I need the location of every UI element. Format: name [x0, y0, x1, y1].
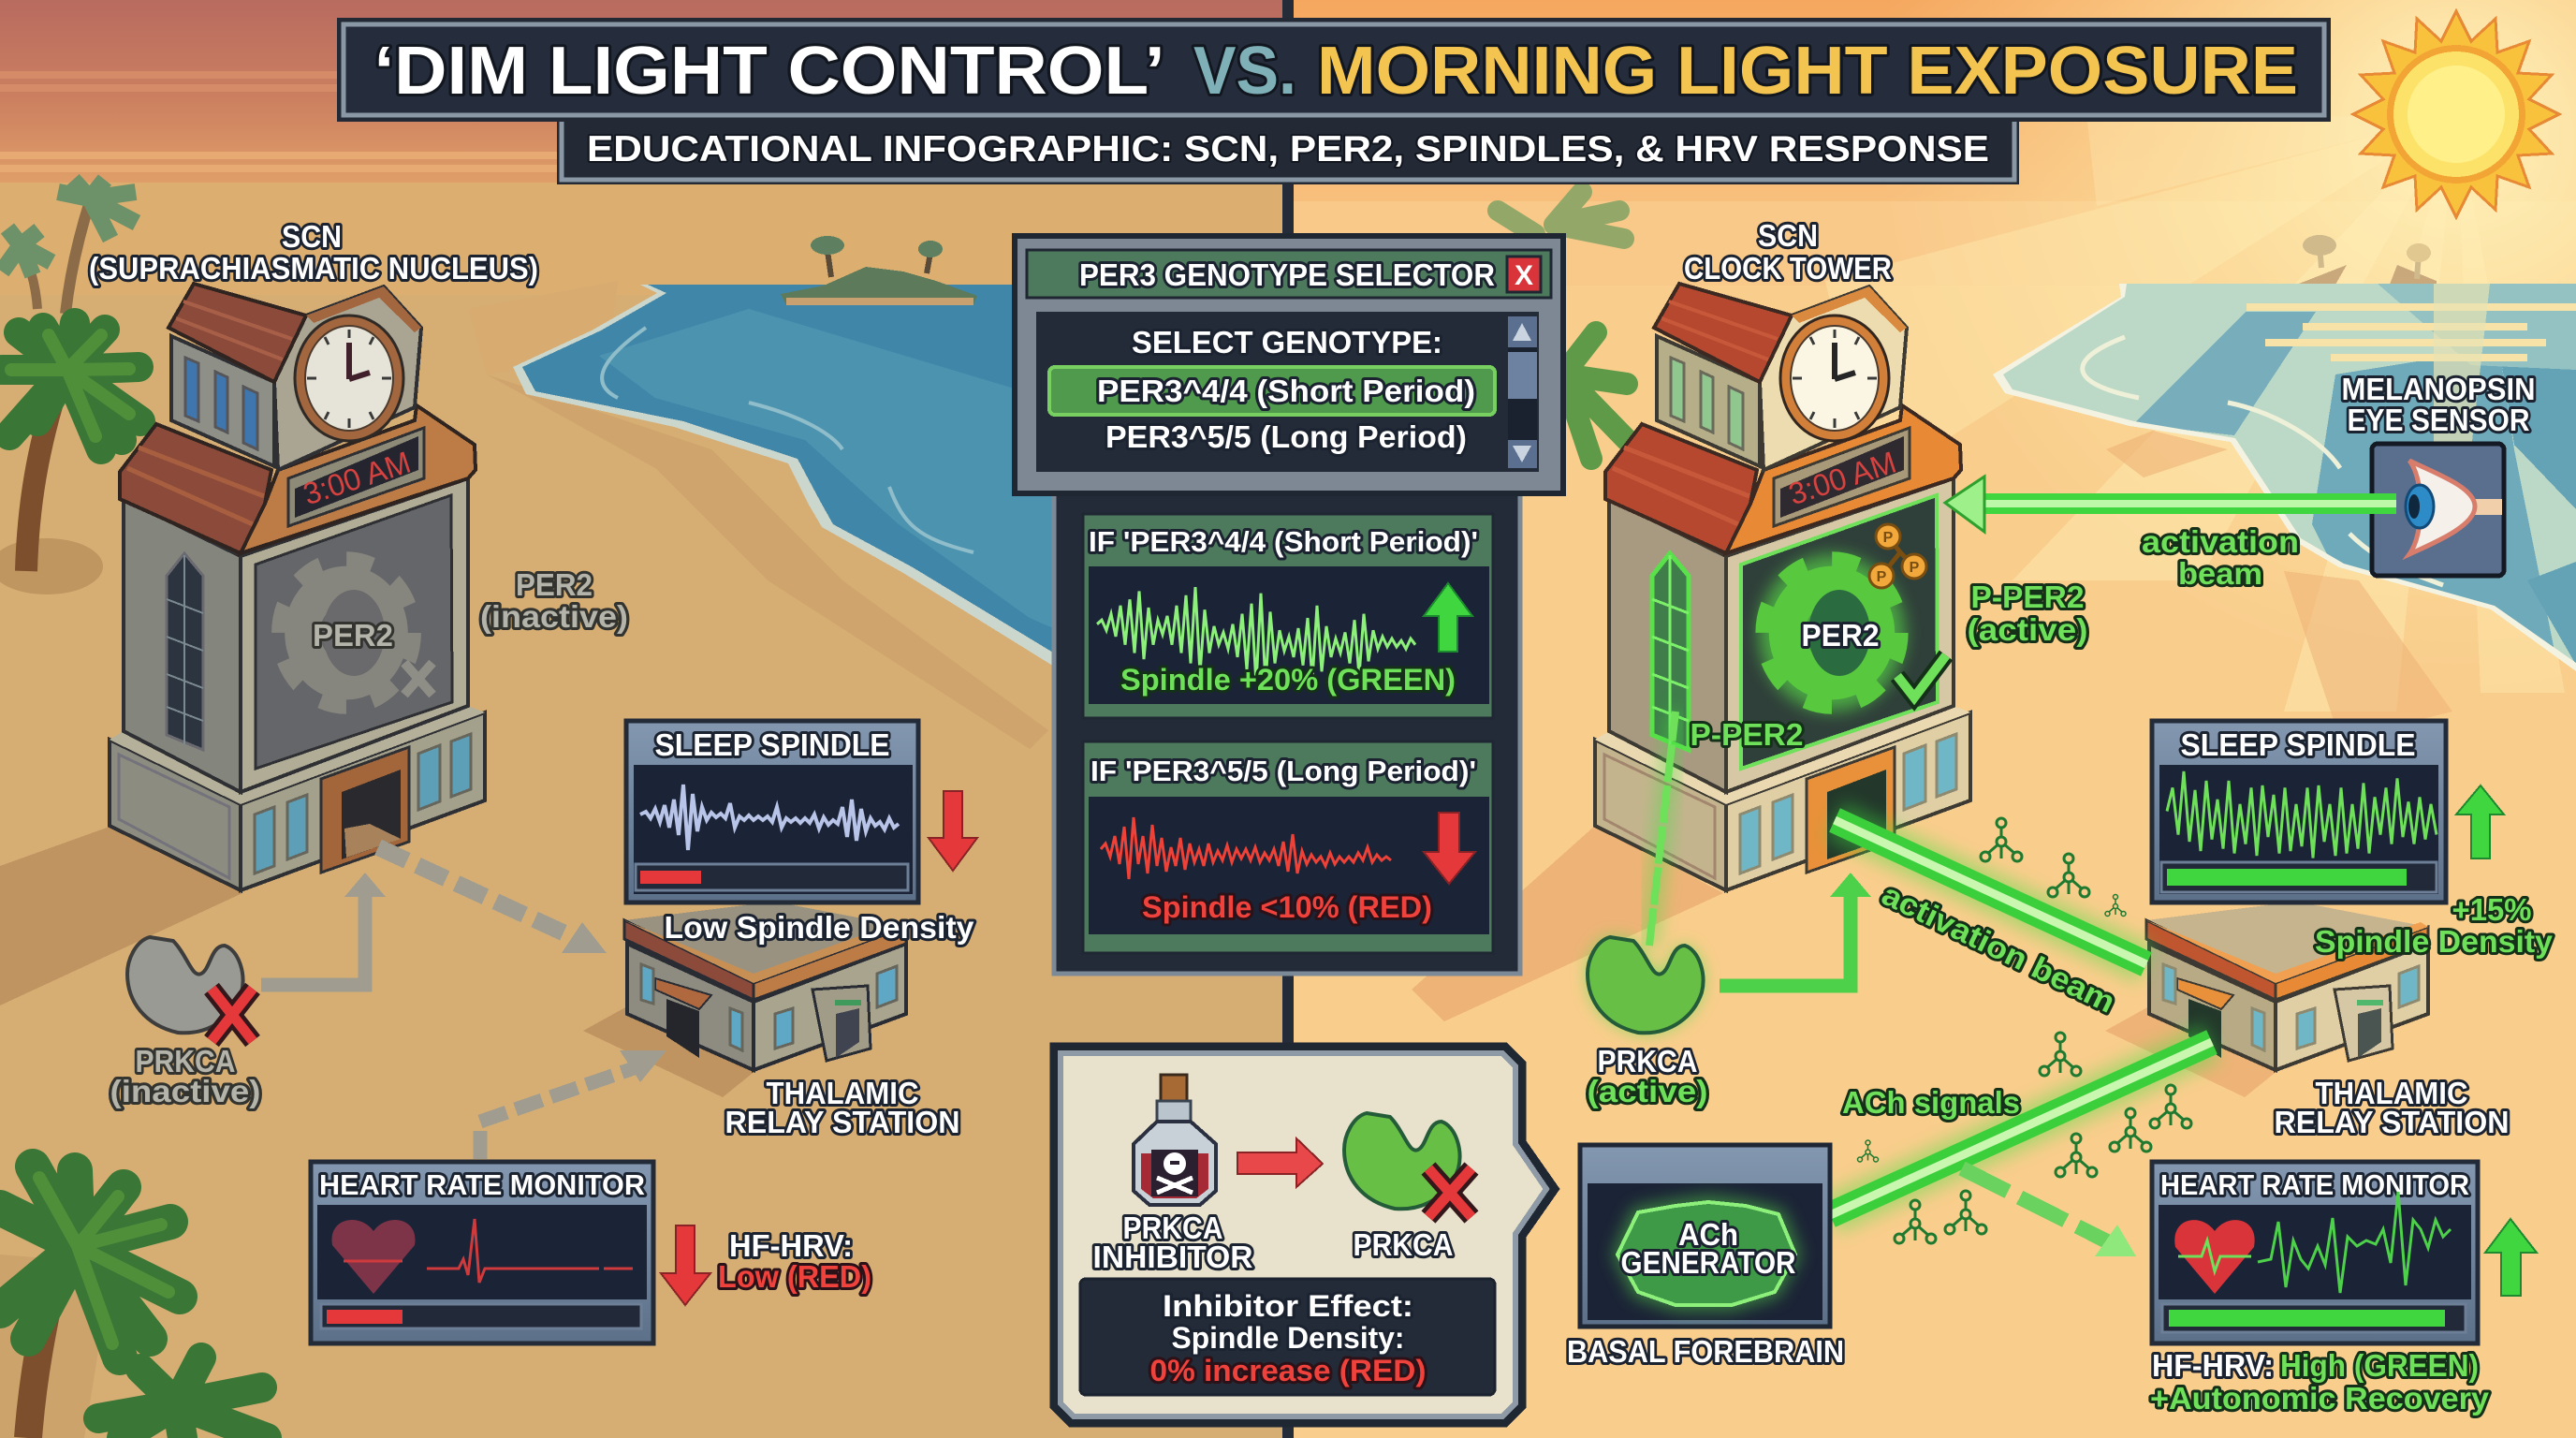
generator label [1621, 1217, 1796, 1280]
second option: PER3^5/5 (Long Period) [1105, 419, 1467, 454]
inhibitor label: PRKCA [1123, 1211, 1222, 1245]
HF-HRV high label: HF-HRV: [2152, 1348, 2274, 1383]
result card: short period [1083, 514, 1493, 718]
inhibitor panel: PRKCA [1354, 1227, 1453, 1262]
inhibitor label [1093, 1211, 1253, 1274]
phosphate group icons: P [1883, 530, 1894, 546]
ocean: bright right [1993, 284, 2576, 671]
inhibitor effect box: 0% increase (RED) [1149, 1354, 1427, 1387]
upper roof [168, 284, 306, 382]
lower roof [1605, 405, 1961, 553]
phosphate group icons [1869, 524, 1926, 588]
labels: left side [89, 219, 974, 1294]
melanopsin label [2342, 372, 2535, 437]
PRKCA active label [1588, 1044, 1707, 1108]
spindle density increase label: +15% [2452, 892, 2531, 927]
panel heading: SLEEP SPINDLE [655, 727, 889, 762]
SCN clock tower label: SCN [1758, 218, 1818, 253]
thalamic relay station: active [2146, 902, 2428, 1070]
arrow: inactive PRKCA to tower [261, 873, 386, 985]
PER2 active gear label: PER2 [1801, 618, 1880, 653]
ocean: dim left [513, 285, 1288, 786]
window header: PER3 GENOTYPE SELECTOR [1079, 257, 1495, 292]
result card: short period: Spindle +20% (GREEN) [1120, 663, 1456, 697]
HF-HRV high label [2150, 1348, 2490, 1416]
flat ECG trace [344, 1219, 633, 1283]
close button [1507, 257, 1541, 292]
ACh molecules [1857, 818, 2191, 1243]
result card: long period: IF 'PER3^5/5 (Long Period)' [1090, 755, 1476, 787]
lower roof [120, 405, 476, 553]
red waveform [1101, 817, 1391, 879]
PER2 inactive label: (inactive) [480, 599, 628, 634]
palm tree: large left [0, 323, 140, 594]
green waveform [1097, 587, 1415, 683]
title text: morning: MORNING LIGHT EXPOSURE [1317, 34, 2298, 109]
generator label: GENERATOR [1621, 1245, 1796, 1280]
icon: poison bottle [1134, 1075, 1216, 1205]
SCN label [89, 219, 538, 286]
genotype results panel [1054, 487, 1520, 974]
phosphate group icons: P [1910, 560, 1920, 576]
selected option: PER3^4/4 (Short Period) [1097, 374, 1475, 408]
tower body [1609, 478, 1954, 792]
islands: bright right [2299, 265, 2347, 284]
bright heart icon [2174, 1220, 2255, 1294]
PER2 gear label: PER2 [313, 618, 393, 653]
active gear [1759, 554, 1946, 712]
title text: vs: VS. [1193, 34, 1296, 109]
inactive gear [280, 560, 432, 706]
P-PER2 active label [1968, 580, 2087, 647]
basal forebrain label: BASAL FOREBRAIN [1567, 1334, 1844, 1369]
inhibitor label: INHIBITOR [1093, 1240, 1253, 1274]
upper roof [1654, 284, 1792, 382]
SCN clock tower label: CLOCK TOWER [1684, 251, 1892, 286]
beam arrow: eye to clock tower [1945, 477, 2396, 532]
HF-HRV low label: Low (RED) [718, 1259, 871, 1294]
analog clock [295, 315, 403, 441]
digital clock: 3:00 AM [1784, 445, 1900, 511]
result card: long period [1083, 741, 1493, 953]
inhibitor effect box: Spindle Density: [1172, 1321, 1404, 1355]
HF-HRV low label [718, 1228, 871, 1294]
activation beam label: eye [2142, 524, 2299, 591]
ACh beam: generator to station [1830, 1042, 2212, 1215]
heart rate monitor panel: active [2152, 1162, 2478, 1343]
inhibitor effect box [1080, 1279, 1495, 1395]
P-PER2 active label: P-PER2 [1971, 580, 2084, 614]
digital clock [1774, 428, 1910, 526]
close button: X [1515, 260, 1533, 291]
dashed arrow: heart monitor to station [480, 1050, 666, 1159]
PRKCA active blob [1588, 937, 1703, 1033]
PRKCA inactive blob [127, 937, 253, 1041]
PER3 genotype selector window [1015, 236, 1563, 493]
palm trees: right background [1498, 192, 1627, 459]
arrow: spindle down [929, 791, 977, 871]
down arrow [1424, 813, 1475, 884]
strong ECG trace [2258, 1192, 2451, 1293]
arrow: spindle up [2456, 785, 2504, 858]
melanopsin label: EYE SENSOR [2348, 403, 2530, 437]
ACh generator panel [1580, 1145, 1830, 1327]
inhibitor panel [1054, 1047, 1555, 1423]
sleep spindle panel: dim [626, 721, 918, 902]
subtitle bar: EDUCATIONAL INFOGRAPHIC: SCN, PER2, SPINDLES, & HRV RESPONSE [587, 129, 1989, 169]
activation beam: tower to station [1835, 820, 2146, 964]
up arrow [1424, 583, 1472, 652]
selected option [1049, 367, 1495, 415]
thalamic relay label: RELAY STATION [2275, 1105, 2509, 1139]
analog clock [1780, 315, 1889, 441]
HF-HRV high label: High (GREEN) [2280, 1348, 2479, 1383]
island: dim left [781, 236, 977, 305]
SCN clock tower label [1684, 218, 1892, 286]
thalamic relay label: THALAMIC [2316, 1076, 2467, 1110]
PRKCA inactive label: PRKCA [135, 1044, 236, 1078]
thalamic relay label: RELAY STATION [724, 1105, 960, 1139]
ground shadows [0, 825, 2278, 1097]
HF-HRV low label: HF-HRV: [729, 1228, 853, 1263]
low level bar [640, 871, 701, 884]
dashed arrow: tower to station [378, 847, 607, 953]
upper block with windows [1657, 286, 1907, 470]
PRKCA active label: (active) [1588, 1074, 1707, 1108]
palm trees: background left [2, 180, 137, 314]
background: bright right half [1288, 0, 2576, 1438]
dim heart icon [332, 1220, 415, 1294]
high level bar [2169, 1310, 2445, 1327]
L arrow: PRKCA active to tower [1720, 873, 1871, 986]
spindle density increase label: Spindle Density [2315, 924, 2554, 959]
inhibitor effect box: Inhibitor Effect: [1163, 1289, 1413, 1323]
arrow: HRV down [661, 1225, 710, 1305]
tower base [110, 706, 485, 890]
sun [2353, 11, 2559, 217]
subtitle bar [557, 122, 2019, 184]
thalamic relay label [724, 1076, 960, 1139]
arrow: HRV up [2485, 1219, 2537, 1296]
PRKCA inactive label [110, 1044, 260, 1108]
panel heading: HEART RATE MONITOR [319, 1168, 645, 1201]
dashed arrow: beam to heart monitor [1962, 1168, 2136, 1256]
panel heading: SLEEP SPINDLE [2181, 727, 2415, 762]
PER2 inactive label [480, 567, 628, 634]
SCN label: (SUPRACHIASMATIC NUCLEUS) [89, 251, 538, 286]
thalamic relay label [2275, 1076, 2509, 1139]
P-PER2 active label: (active) [1968, 612, 2087, 647]
SCN clock tower: active [1595, 284, 1970, 890]
result card: long period: Spindle <10% (RED) [1142, 890, 1432, 924]
thalamic relay station: dim [624, 902, 906, 1070]
PRKCA inactive label: (inactive) [110, 1074, 260, 1108]
title bar [337, 18, 2331, 122]
upper block with windows [171, 286, 421, 470]
ACh signals label: ACh signals [1842, 1085, 2020, 1120]
title text: dim: ‘DIM LIGHT CONTROL’ [374, 34, 1164, 109]
digital clock [288, 428, 424, 526]
thalamic relay label: THALAMIC [766, 1076, 919, 1110]
melanopsin eye sensor [2372, 444, 2504, 576]
melanopsin label: MELANOPSIN [2342, 372, 2535, 406]
result card: short period: IF 'PER3^4/4 (Short Period)' [1089, 525, 1478, 558]
generator label: ACh [1678, 1217, 1738, 1252]
high level bar [2167, 869, 2407, 886]
scrollbar [1508, 316, 1537, 468]
low level bar [327, 1310, 402, 1324]
dim spindle waveform [640, 785, 899, 850]
PER2 inactive label: PER2 [516, 567, 593, 602]
PER3 genotype selector window: SELECT GENOTYPE: [1132, 325, 1442, 360]
palm trees: bottom left [0, 1167, 267, 1438]
activation beam label: eye: beam [2178, 556, 2262, 591]
beam: PRKCA to P-PER2 [1649, 712, 1676, 946]
panel heading: HEART RATE MONITOR [2160, 1168, 2469, 1201]
tower base [1595, 706, 1970, 890]
arrow: inhibitor to PRKCA [1237, 1138, 1323, 1187]
low spindle density label: Low Spindle Density [665, 910, 974, 945]
labels: right side [1567, 218, 2554, 1416]
activation beam label: eye: activation [2142, 524, 2299, 559]
activation beam label: diagonal: activation beam [1877, 876, 2121, 1020]
digital clock: 3:00 AM [299, 445, 415, 511]
spindle density increase label [2315, 892, 2554, 959]
strong spindle waveform [2167, 771, 2437, 858]
window header [1027, 250, 1551, 298]
sleep spindle panel: active [2152, 721, 2446, 902]
tower body [124, 478, 468, 792]
center divider [1282, 0, 1294, 1438]
PRKCA blocked icon [1344, 1113, 1471, 1217]
background: dim left half [0, 0, 1288, 1438]
SCN label: SCN [282, 219, 342, 254]
P-PER2 lower label: P-PER2 [1690, 717, 1803, 752]
phosphate group icons: P [1877, 569, 1887, 585]
SCN clock tower: dim [110, 284, 485, 890]
PRKCA active label: PRKCA [1597, 1044, 1698, 1078]
heart rate monitor panel: dim [311, 1162, 653, 1343]
HF-HRV high label: +Autonomic Recovery [2150, 1381, 2490, 1416]
